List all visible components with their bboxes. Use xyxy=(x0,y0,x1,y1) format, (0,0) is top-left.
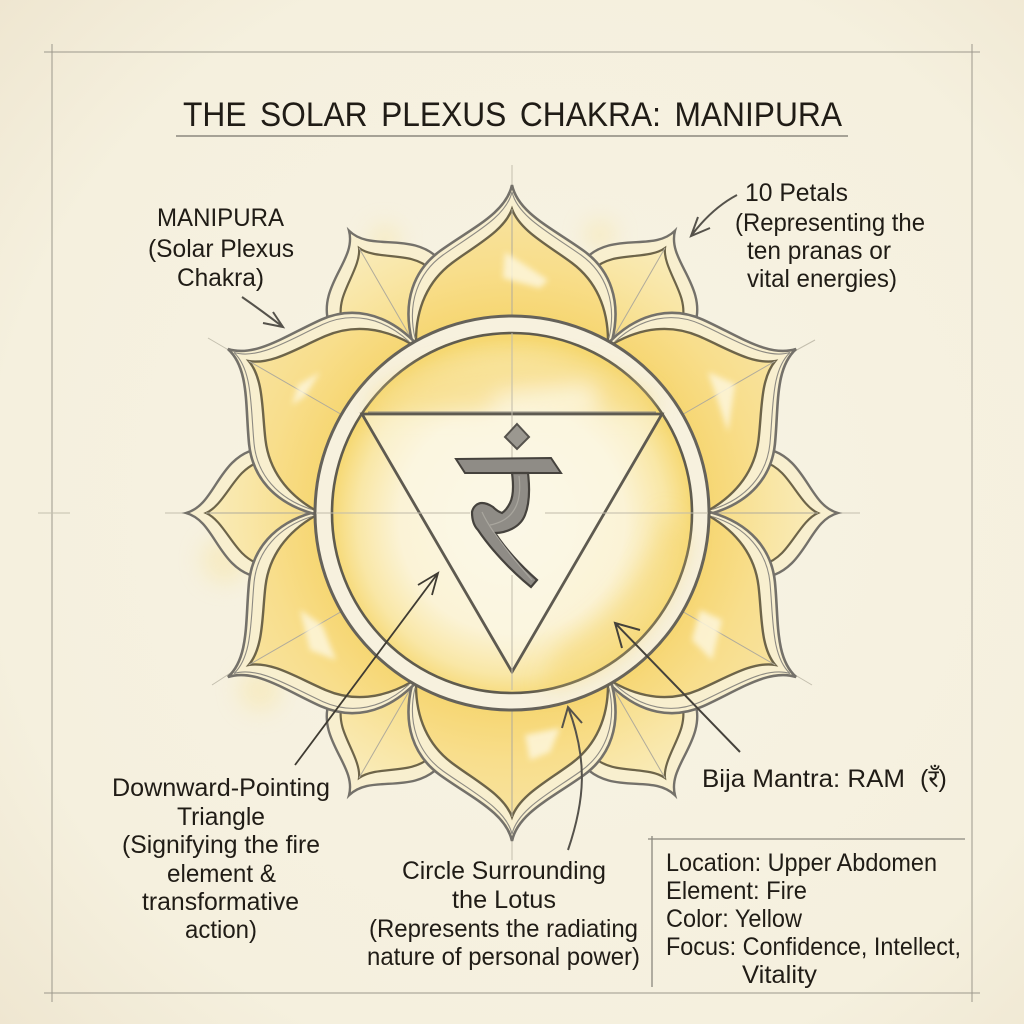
downward triangle xyxy=(362,412,662,672)
title: THE SOLAR PLEXUS CHAKRA: MANIPURA xyxy=(183,96,842,134)
lotus petals xyxy=(176,185,848,841)
arrow: bija mantra xyxy=(615,623,740,752)
label: downward triangle: action) xyxy=(185,916,257,944)
info box: Vitality xyxy=(742,961,818,989)
label: circle surrounding the lotus: (Represents the radiating xyxy=(369,915,638,943)
label: circle surrounding the lotus: the Lotus xyxy=(452,886,556,914)
info box: Location: Upper Abdomen xyxy=(666,849,937,877)
label: circle surrounding the lotus: nature of personal power) xyxy=(367,943,640,971)
label: Manipura xyxy=(148,204,294,292)
arrow: Manipura xyxy=(242,297,283,327)
label: Manipura: (Solar Plexus xyxy=(148,235,294,263)
label: downward triangle: element & xyxy=(167,860,276,888)
label: 10 petals: ten pranas or xyxy=(747,237,891,265)
bija mantra symbol xyxy=(456,424,561,587)
label: 10 petals: 10 Petals xyxy=(745,179,848,207)
label: 10 petals: vital energies) xyxy=(747,265,897,293)
disc wash xyxy=(370,359,690,690)
arrow: circle xyxy=(562,707,582,850)
label: bija mantra: Bija Mantra: RAM xyxy=(702,765,905,793)
curved stem xyxy=(472,473,537,587)
diamond xyxy=(505,424,529,449)
label: downward triangle: transformative xyxy=(142,888,299,916)
info box xyxy=(648,836,965,989)
label: circle surrounding the lotus: Circle Surrounding xyxy=(402,857,606,885)
faint construction guides xyxy=(38,165,860,860)
label: Manipura: MANIPURA xyxy=(157,204,284,232)
info box: Focus: Confidence, Intellect, xyxy=(666,933,961,961)
guide lines in centre xyxy=(316,333,708,690)
label: downward triangle: Triangle xyxy=(177,803,265,831)
label: circle surrounding the lotus xyxy=(367,857,640,971)
petal highlights xyxy=(292,252,735,760)
large petals xyxy=(176,185,848,841)
shading xyxy=(482,476,532,580)
info box: Color: Yellow xyxy=(666,905,803,933)
label: downward triangle: (Signifying the fire xyxy=(122,831,320,859)
info box: Element: Fire xyxy=(666,877,807,905)
arrow: 10 petals xyxy=(691,195,737,236)
label: downward triangle xyxy=(112,774,330,944)
small petals xyxy=(186,198,838,828)
label: Manipura: Chakra) xyxy=(177,264,264,292)
arrow: triangle xyxy=(295,573,438,765)
petal wash halo xyxy=(201,219,616,712)
label: 10 petals: (Representing the xyxy=(735,209,925,237)
label: downward triangle: Downward-Pointing xyxy=(112,774,330,802)
bar xyxy=(456,458,561,473)
surrounding circle xyxy=(315,316,709,710)
label: bija mantra: (रँ) xyxy=(920,764,947,793)
label: 10 petals xyxy=(735,179,925,293)
